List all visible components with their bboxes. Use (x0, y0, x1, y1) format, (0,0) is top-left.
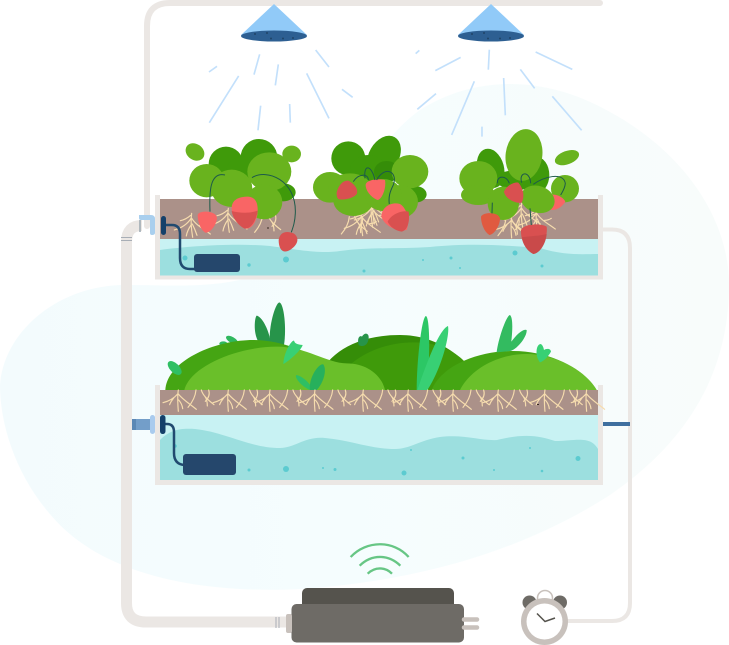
top tank (155, 195, 603, 280)
top tank water light (160, 239, 598, 276)
small leaves (165, 341, 325, 390)
dark leaves (209, 139, 296, 201)
back grass (255, 302, 285, 345)
bottom tank soil (160, 390, 598, 415)
top tank soil (160, 199, 598, 239)
soil speck (267, 228, 269, 229)
bottom valve (132, 415, 155, 434)
left pipe joints (121, 238, 279, 628)
top tank pump (161, 216, 240, 272)
bottom tank (155, 385, 603, 485)
dark leaves (331, 130, 427, 203)
stems (210, 175, 295, 232)
dark leaves (473, 146, 549, 193)
light rays right (416, 50, 582, 137)
alarm clock (521, 590, 568, 645)
berries (337, 181, 357, 200)
top valve (139, 215, 155, 235)
heart leaf (537, 344, 551, 362)
background blob (0, 84, 729, 590)
bottom tank roots (163, 390, 605, 411)
top tank frame (155, 195, 603, 280)
hill left front (184, 347, 385, 390)
bottom tank frame (155, 385, 603, 485)
back tips (219, 334, 239, 346)
bottom tank water (160, 429, 598, 480)
lamp right (458, 4, 524, 42)
big berry (232, 197, 258, 229)
bottom bubbles (173, 444, 580, 476)
stems (353, 168, 394, 204)
lamp left (241, 4, 307, 42)
light rays left (209, 50, 353, 130)
hill right (432, 351, 597, 390)
berries (198, 212, 217, 233)
plant middle (313, 130, 428, 232)
hill left (165, 340, 353, 390)
bottom tank pump (160, 415, 236, 475)
pipe: left return (126, 226, 286, 622)
plant right (459, 127, 581, 254)
light leaves (459, 127, 581, 220)
pipe: right side (565, 230, 630, 621)
tall grass (417, 316, 429, 390)
soil speck (537, 404, 539, 405)
leaf on mid hill (358, 334, 369, 346)
right grass (497, 315, 527, 352)
top tank roots (174, 200, 392, 237)
top tank water (160, 245, 598, 276)
berries and stems (547, 195, 565, 210)
plant left (182, 139, 301, 252)
wifi signal (351, 544, 409, 574)
bubbles (182, 250, 544, 272)
bottom tank water light (160, 415, 598, 480)
hill middle (315, 335, 482, 390)
controller box (286, 588, 477, 642)
drain pipe (603, 422, 630, 426)
light leaves (313, 155, 428, 218)
pipe: top feed (147, 3, 600, 226)
light leaves (182, 140, 301, 219)
bottom plants (165, 302, 482, 390)
